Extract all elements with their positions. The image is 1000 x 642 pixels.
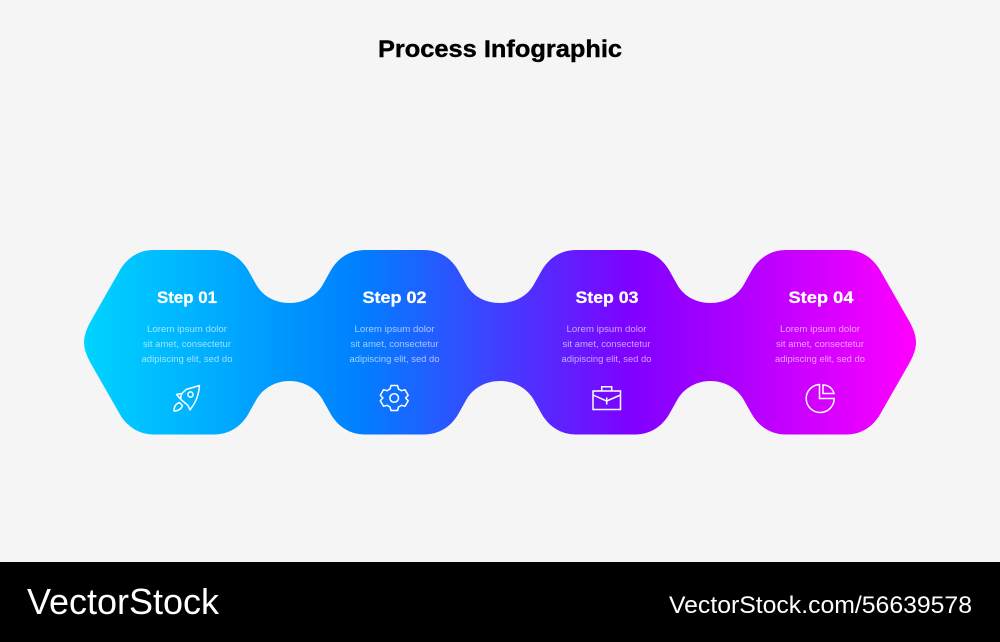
step 03 body text <box>562 324 652 365</box>
step 04 body text: adipiscing elit, sed do <box>775 354 865 365</box>
step 01 body text: Lorem ipsum dolor <box>147 324 227 335</box>
footer image id: VectorStock.com/56639578 <box>669 592 972 619</box>
step 04 body text: sit amet, consectetur <box>776 339 864 350</box>
step 03 body text: sit amet, consectetur <box>562 339 650 350</box>
step 02 <box>350 288 440 410</box>
step 01 heading: Step 01 <box>157 288 217 307</box>
step 02 body text <box>350 324 440 365</box>
icon: rocket <box>174 386 200 411</box>
step 04 body text: Lorem ipsum dolor <box>780 324 860 335</box>
step 01 body text: adipiscing elit, sed do <box>142 354 232 365</box>
step 04 body text <box>775 324 865 365</box>
step 03 <box>562 288 652 410</box>
step 03 body text: adipiscing elit, sed do <box>562 354 652 365</box>
footer bar <box>0 562 1000 642</box>
title: Process Infographic <box>378 36 622 63</box>
step 02 body text: adipiscing elit, sed do <box>350 354 440 365</box>
step 02 heading: Step 02 <box>362 288 426 307</box>
icon: gear <box>380 386 408 410</box>
step 03 heading: Step 03 <box>576 288 638 307</box>
process band: four connected hexagon steps <box>84 250 916 434</box>
step 04 <box>775 288 865 412</box>
step 01 <box>142 288 232 411</box>
icon: pie chart <box>806 384 834 412</box>
step 02 body text: sit amet, consectetur <box>350 339 438 350</box>
step 03 body text: Lorem ipsum dolor <box>566 324 646 335</box>
step 02 body text: Lorem ipsum dolor <box>354 324 434 335</box>
step 01 body text: sit amet, consectetur <box>143 339 231 350</box>
step 04 heading: Step 04 <box>788 288 854 307</box>
footer logo: VectorStock <box>27 581 220 622</box>
icon: briefcase <box>593 387 620 410</box>
step 01 body text <box>142 324 232 365</box>
